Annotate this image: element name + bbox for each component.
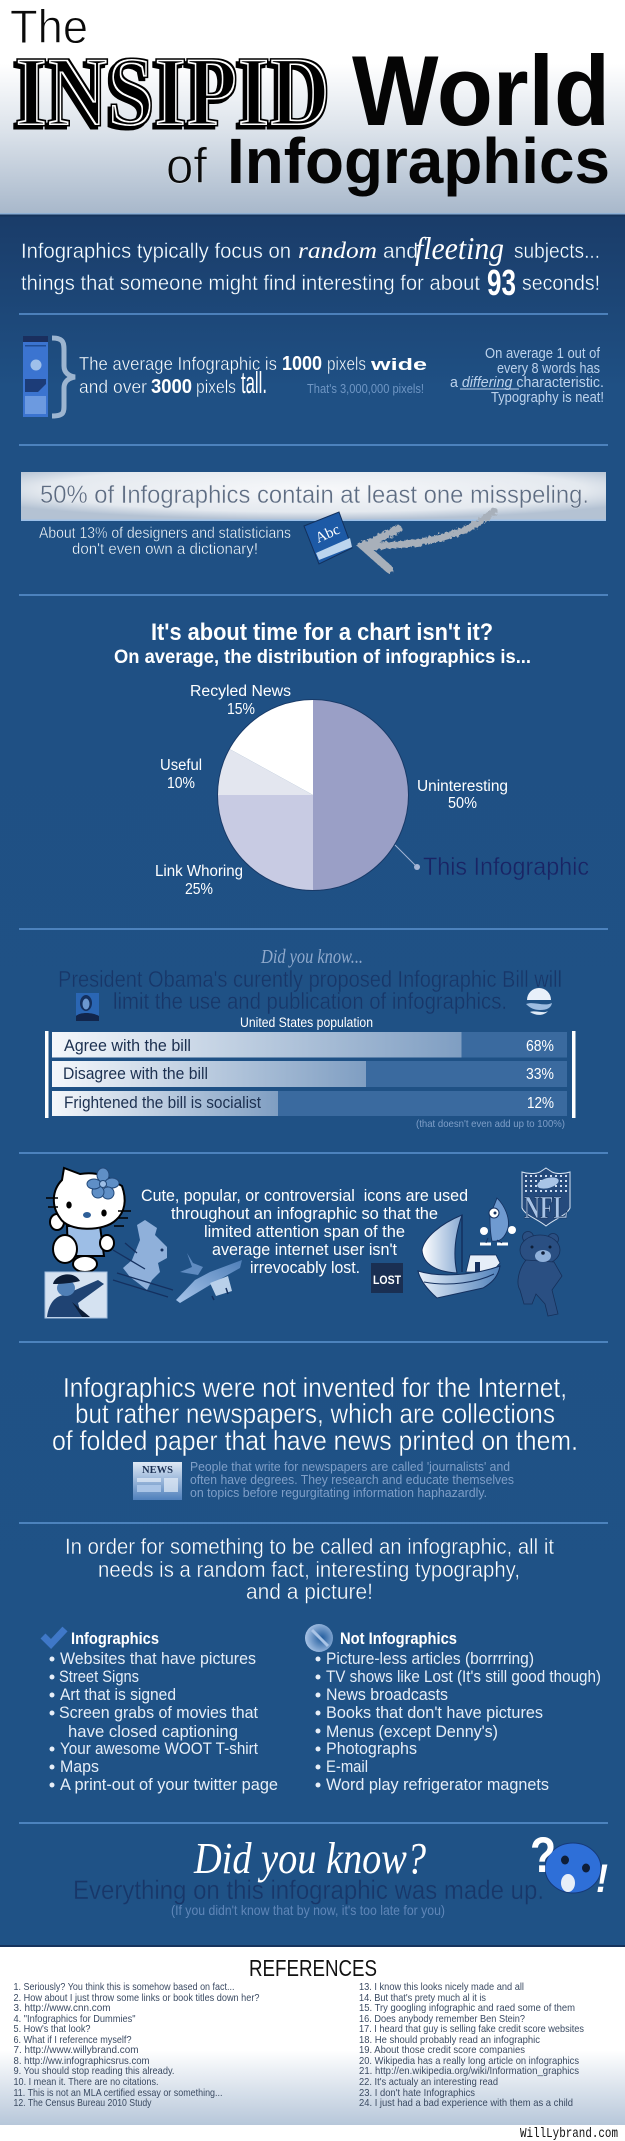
- icon: NFL shield: [522, 1168, 570, 1226]
- icon: miniature infographic: [23, 336, 48, 417]
- bar: frightened: Frightened the bill is socialist: [64, 1093, 261, 1112]
- pie label: recycled news: 15%: [227, 701, 255, 718]
- text: journalists note: on topics before regurgitating information haphazardly.: [190, 1486, 487, 1500]
- text: average size: pixels: [327, 354, 366, 374]
- list: references left: [14, 1981, 260, 2109]
- text: bill statement: [58, 966, 562, 1014]
- list: not infographics: Picture-less articles (borrrring): [326, 1649, 534, 1668]
- bar: agree: [52, 1032, 567, 1058]
- callout: this infographic: [395, 845, 589, 881]
- list: infographics: [50, 1630, 278, 1794]
- icon: Obama portrait: [76, 993, 99, 1021]
- heading: chart: [114, 619, 531, 668]
- bar: disagree: Disagree with the bill: [63, 1064, 208, 1083]
- text: newspapers statement: but rather newspapers, which are collections: [75, 1398, 555, 1429]
- list: infographics: Screen grabs of movies that: [59, 1703, 258, 1722]
- pie label: useful: [160, 757, 202, 792]
- title: INSIPID: INSIPID: [15, 36, 330, 147]
- panel: newspapers: [52, 1372, 578, 1500]
- list: references left: 5. How's that look?: [14, 2023, 91, 2035]
- list: infographics: have closed captioning: [68, 1722, 238, 1741]
- list: references right: [359, 1981, 584, 2109]
- text: dictionary note: About 13% of designers and statisticians: [39, 525, 291, 542]
- icon: not symbol: [305, 1624, 333, 1652]
- icon: check mark: [43, 1629, 65, 1644]
- pie label: useful: 10%: [167, 775, 195, 792]
- text: definition: and a picture!: [246, 1579, 373, 1604]
- text: chart title: United States population: [240, 1015, 373, 1030]
- icon: dancing banana: [480, 1198, 516, 1244]
- bar: agree: 68%: [526, 1038, 554, 1055]
- list: not infographics: Menus (except Denny's): [326, 1722, 498, 1741]
- title: of: of: [166, 138, 207, 194]
- text: newspapers statement: Infographics were not invented for the Internet,: [63, 1372, 567, 1403]
- icon: golfer photo: [45, 1272, 107, 1318]
- bar: frightened: [52, 1091, 567, 1116]
- panel: icons section: [45, 1168, 570, 1318]
- list: references right: 24. I just had a bad experience with them as a child: [359, 2097, 573, 2109]
- text: dictionary note: [39, 525, 291, 558]
- panel: closing statement: [73, 1827, 608, 1918]
- panel: intro statement: seconds!: [522, 272, 600, 295]
- list: references left: 2. How about I just throw some links or book titles down her?: [14, 1992, 260, 2004]
- panel: intro statement: Infographics typically focus on: [21, 240, 291, 263]
- pie label: uninteresting: 50%: [448, 795, 477, 812]
- panel: intro statement: random: [298, 238, 377, 263]
- text: differing characteristic note: [450, 346, 604, 406]
- bar chart: bill opinion: [45, 1031, 576, 1118]
- text: bill statement: limit the use and publication of infographics.: [113, 988, 507, 1014]
- icon: airplane: [176, 1253, 242, 1303]
- banner bar: [21, 472, 606, 521]
- pie label: link whoring: Link Whoring: [155, 863, 243, 880]
- text: average size: [79, 353, 427, 400]
- list: references right: 19. About those credit score companies: [359, 2044, 525, 2056]
- list: references right: 17. I heard that guy is selling fake credit score websites: [359, 2023, 584, 2035]
- text: average size: 1000: [282, 353, 322, 375]
- banner bar: 50% of Infographics contain at least one misspeling.: [40, 481, 589, 509]
- text: average size: pixels: [196, 377, 236, 397]
- list: references right: 22. It's actualy an interesting read: [359, 2076, 498, 2088]
- list: infographics: Art that is signed: [60, 1685, 176, 1704]
- text: icons explanation: Cute, popular, or controversial icons are used: [141, 1186, 468, 1205]
- pie label: recycled news: Recyled News: [190, 683, 291, 700]
- text: differing characteristic note: every 8 words has: [497, 361, 600, 377]
- text: dictionary note: don't even own a dictionary!: [72, 541, 258, 558]
- list: references right: 20. Wikipedia has a really long article on infographics: [359, 2055, 579, 2067]
- list: references right: 21. http://en.wikipedia.org/wiki/Information_graphics: [359, 2065, 579, 2077]
- bar: disagree: 33%: [526, 1066, 554, 1083]
- list: infographics: Maps: [60, 1757, 99, 1776]
- pie chart: [218, 700, 408, 890]
- panel: title header: [0, 0, 625, 216]
- icon: newspaper: NEWS: [142, 1465, 173, 1476]
- list: references right: 18. He should probably read an infographic: [359, 2034, 540, 2046]
- text: footnote: (that doesn't even add up to 100%): [416, 1118, 565, 1130]
- text: everything made up: Everything on this infographic was made up.: [73, 1875, 544, 1905]
- bar: disagree: [52, 1061, 567, 1087]
- icon: Lost logo: [371, 1263, 403, 1293]
- text: journalists note: [190, 1460, 514, 1500]
- icon: Lost logo: LOST: [373, 1273, 402, 1287]
- icon: Hello Kitty: [46, 1168, 131, 1272]
- list: references left: 7. http://www.willybrand.com: [14, 2044, 139, 2056]
- list: references right: 13. I know this looks nicely made and all: [359, 1981, 524, 1993]
- list: not infographics: News broadcasts: [326, 1685, 448, 1704]
- list: infographics: Street Signs: [59, 1667, 139, 1686]
- panel: intro statement: fleeting: [415, 230, 504, 266]
- list: references right: 16. Does anybody remember Ben Stein?: [359, 2013, 525, 2025]
- icon: surprised face: !: [596, 1857, 608, 1901]
- icon: ship: [418, 1215, 500, 1298]
- list: not infographics: Not Infographics: [340, 1630, 457, 1648]
- panel: intro statement: and: [383, 240, 418, 263]
- text: icons explanation: throughout an infographic so that the: [171, 1204, 438, 1223]
- list: not infographics: E-mail: [326, 1757, 368, 1776]
- list: not infographics: Word play refrigerator magnets: [326, 1775, 549, 1794]
- text: icons explanation: limited attention span of the: [204, 1222, 405, 1241]
- text: average size: tall.: [241, 365, 267, 400]
- icon: curly brace: [52, 338, 75, 416]
- text: differing characteristic note: a differing characteristic.: [450, 375, 604, 391]
- text: definition: [65, 1534, 555, 1604]
- panel: what makes an infographic: [43, 1534, 601, 1794]
- panel: pixel size facts: [23, 336, 604, 417]
- text: differing characteristic note: Typography is neat!: [491, 390, 604, 406]
- list: infographics: Your awesome WOOT T-shirt: [60, 1739, 258, 1758]
- panel: references: [0, 1945, 625, 2125]
- text: newspapers statement: [52, 1372, 578, 1456]
- panel: intro statement: 93: [487, 262, 516, 303]
- text: average size: and over: [79, 377, 147, 397]
- list: references left: 12. The Census Bureau 2010 Study: [14, 2097, 152, 2109]
- pie label: recycled news: [190, 683, 291, 718]
- text: bill statement: President Obama's curently proposed Infographic Bill will: [58, 966, 562, 992]
- list: infographics: Websites that have pictures: [60, 1649, 256, 1668]
- text: average size: 3000: [151, 376, 192, 398]
- panel: misspelling banner: [21, 472, 606, 569]
- list: not infographics: [316, 1630, 601, 1794]
- list: references left: 4. "Infographics for Dummies": [14, 2013, 136, 2025]
- text: icons explanation: irrevocably lost.: [250, 1258, 360, 1277]
- bar: frightened: 12%: [527, 1095, 554, 1112]
- text: did you know script: Did you know...: [260, 946, 363, 968]
- list: references right: 15. Try googling infographic and raed some of them: [359, 2002, 575, 2014]
- icon: NFL shield: NFL: [524, 1189, 568, 1225]
- icon: pedobear: [518, 1232, 562, 1316]
- list: not infographics: Books that don't have pictures: [326, 1703, 543, 1722]
- icon: dictionary book: [304, 512, 352, 564]
- list: references left: 6. What if I reference myself?: [14, 2034, 132, 2046]
- panel: pie chart section: [114, 619, 589, 898]
- list: references right: 14. But that's prety much al it is: [359, 1992, 486, 2004]
- list: not infographics: Photographs: [326, 1739, 417, 1758]
- panel: Obama bill: [45, 946, 576, 1130]
- list: references left: 9. You should stop reading this already.: [14, 2065, 174, 2077]
- list: references left: 1. Seriously? You think this is somehow based on fact...: [14, 1981, 234, 1993]
- icon: surprised face: ?: [530, 1827, 556, 1883]
- heading: chart: On average, the distribution of infographics is...: [114, 647, 531, 668]
- arrow: chalk arrow: [363, 511, 494, 569]
- text: differing characteristic note: On average 1 out of: [485, 346, 601, 362]
- pie label: uninteresting: [417, 778, 508, 812]
- panel: intro statement: [21, 230, 600, 303]
- text: definition: needs is a random fact, interesting typography,: [98, 1557, 520, 1582]
- text: average size: wide: [370, 355, 427, 374]
- text: average size: The average Infographic is: [79, 354, 277, 374]
- list: references right: 23. I don't hate Infographics: [359, 2087, 475, 2099]
- pie label: link whoring: 25%: [185, 881, 213, 898]
- list: infographics: Infographics: [71, 1630, 159, 1648]
- icon: dictionary book: Abc: [313, 522, 343, 547]
- callout: this infographic: This Infographic: [423, 853, 589, 881]
- panel: intro statement: subjects...: [514, 240, 600, 263]
- text: icons explanation: [141, 1186, 468, 1277]
- title: Infographics: Infographics: [227, 125, 610, 197]
- title: World: World: [352, 35, 610, 146]
- icon: surprised face: [530, 1827, 608, 1901]
- heading: chart: It's about time for a chart isn't it?: [151, 619, 493, 646]
- list: references left: 10. I mean it. There are no citations.: [14, 2076, 158, 2088]
- text: three million pixels note: That's 3,000,000 pixels!: [307, 382, 424, 396]
- heading: did you know: Did you know?: [193, 1834, 426, 1883]
- list: references left: 3. http://www.cnn.com: [14, 2002, 111, 2014]
- title: The: The: [10, 0, 88, 53]
- list: not infographics: TV shows like Lost (It's still good though): [326, 1667, 601, 1686]
- list: references left: 8. http://ww.infographicsrus.com: [14, 2055, 150, 2067]
- text: icons explanation: average internet user isn't: [212, 1240, 397, 1259]
- pie label: link whoring: [155, 863, 243, 898]
- text: journalists note: often have degrees. They research and educate themselves: [190, 1473, 514, 1487]
- icon: skiing bunny: [113, 1220, 173, 1297]
- heading: references: REFERENCES: [249, 1955, 377, 1981]
- pie label: useful: Useful: [160, 757, 202, 774]
- pie label: uninteresting: Uninteresting: [417, 778, 508, 795]
- panel: intro statement: things that someone might find interesting for about: [21, 272, 480, 295]
- icon: newspaper: [133, 1462, 182, 1500]
- text: journalists note: People that write for newspapers are called 'journalists' and: [190, 1460, 510, 1474]
- list: references left: 11. This is not an MLA certified essay or something...: [14, 2087, 222, 2099]
- icon: Obama campaign logo: [526, 988, 552, 1015]
- bar: agree: Agree with the bill: [64, 1036, 191, 1055]
- text: definition: In order for something to be called an infographic, all it: [65, 1534, 555, 1559]
- list: infographics: A print-out of your twitter page: [60, 1775, 278, 1794]
- text: too late note: (If you didn't know that by now, it's too late for you): [171, 1902, 445, 1918]
